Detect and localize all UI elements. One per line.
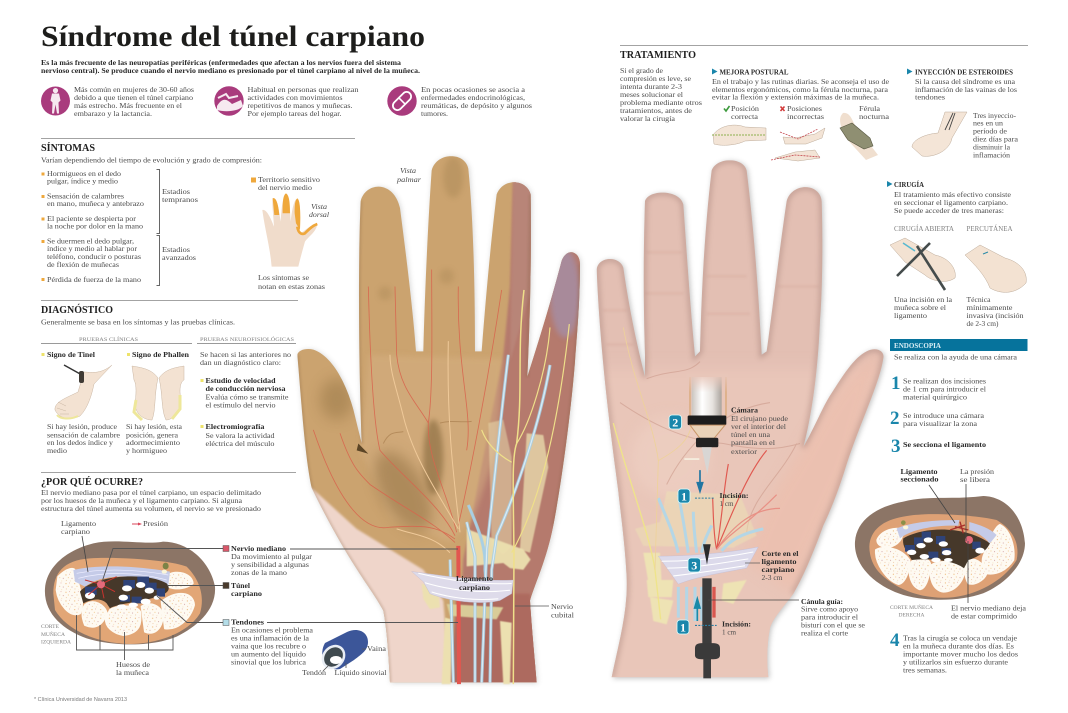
step 4: 4 bbox=[890, 630, 900, 651]
label: vista palmar bbox=[396, 166, 422, 184]
text: demographics: debido a que tienen el túnel carpiano bbox=[74, 93, 193, 102]
carpal ligament band bbox=[658, 547, 758, 584]
test: tinel bbox=[42, 350, 121, 455]
ulnar nerve bbox=[613, 327, 692, 619]
list: symptoms: Hormigueos en el dedo bbox=[47, 169, 121, 178]
label: tendones: vaina que los recubre o bbox=[231, 642, 306, 650]
intro paragraph: Es la más frecuente de las neuropatías periféricas (enfermedades que afectan a los nervios fuera del sistema bbox=[41, 58, 401, 67]
text: endoscopia intro: Se realiza con la ayuda de una cámara bbox=[894, 352, 1018, 362]
label: nervio cubital: cubital bbox=[551, 610, 575, 620]
label: la presión se libera bbox=[960, 467, 994, 484]
bracket: advanced stages: avanzados bbox=[162, 253, 196, 262]
illustration: correct hand bbox=[712, 125, 766, 145]
step 3 bbox=[891, 436, 986, 457]
label: tendones bbox=[223, 618, 314, 666]
text: explanation bbox=[41, 488, 261, 513]
test: phallen bbox=[126, 350, 190, 455]
label: vista palmar: palmar bbox=[396, 175, 422, 184]
test: tinel: Signo de Tinel bbox=[47, 350, 96, 359]
label: tendones: Tendones bbox=[231, 618, 264, 626]
list: symptoms: teléfono, conducir o posturas bbox=[47, 252, 141, 261]
label: ligamento carpiano bbox=[61, 519, 96, 536]
label: tendones: un aumento del líquido bbox=[231, 650, 306, 658]
bracket: early stages: Estadios bbox=[162, 187, 190, 196]
footer source: * Clínica Universidad de Navarra 2013 bbox=[34, 697, 127, 703]
label: huesos: la muñeca bbox=[116, 668, 150, 677]
test: electromyography: Se valora la actividad bbox=[206, 431, 275, 440]
hand shadow bbox=[598, 161, 885, 678]
label: cánula guía: Cánula guía: bbox=[801, 597, 843, 606]
label: vista dorsal: dorsal bbox=[309, 210, 329, 219]
label: nervio cubital bbox=[515, 602, 575, 620]
tunnel bbox=[80, 576, 169, 608]
label: corte en el ligamento bbox=[745, 549, 799, 582]
step 4: y utilizarlos sin esfuerzo durante bbox=[903, 658, 1009, 666]
caption: zones: notan en estas zonas bbox=[258, 282, 325, 291]
test: tinel: Si hay lesión, produce bbox=[47, 422, 118, 431]
label: ligamento seccionado bbox=[900, 467, 939, 484]
label: nervio liberado: de estar comprimido bbox=[951, 612, 1017, 620]
label: corte en el ligamento: carpiano bbox=[762, 565, 795, 574]
test: phallen: Si hay lesión, esta bbox=[126, 422, 183, 431]
labels: sheath parts bbox=[302, 644, 387, 677]
step 2: Se introduce una cámara bbox=[903, 411, 985, 420]
label: cámara: túnel en una bbox=[731, 430, 771, 439]
label: tendones: es una inflamación de la bbox=[231, 634, 310, 642]
label: férula: nocturna bbox=[859, 112, 890, 121]
bracket: early stages bbox=[156, 170, 198, 234]
label: nervio mediano: y sensibilidad a algunas bbox=[231, 560, 309, 569]
icon: bandage bbox=[387, 86, 417, 116]
text: síntomas intro: Varían dependiendo del tiempo de evolución y grado de compresión: bbox=[41, 156, 262, 164]
blue arrow up bbox=[695, 599, 700, 621]
intro paragraph bbox=[41, 58, 420, 75]
legend: territory bbox=[251, 175, 320, 192]
icon: woman bbox=[41, 86, 70, 116]
label: huesos: Huesos de bbox=[116, 660, 151, 669]
test: phallen: adormecimiento bbox=[126, 438, 180, 447]
test: nerve conduction: Evalúa cómo se transmite bbox=[206, 392, 289, 402]
metacarpal and wrist bones bbox=[422, 420, 548, 684]
icon: repetitive movement bbox=[214, 86, 244, 116]
label: cámara: Cámara bbox=[731, 406, 758, 414]
tendons bbox=[658, 495, 763, 621]
label: correct position: correcta bbox=[731, 112, 759, 121]
legend: territory: del nervio medio bbox=[258, 183, 312, 192]
leader: nervio mediano bbox=[102, 548, 458, 582]
text: tratamiento intro: problema mediante otros bbox=[620, 98, 702, 107]
label: nervio mediano: zonas de la mano bbox=[231, 568, 287, 577]
step 4: en la muñeca durante dos días. Es bbox=[903, 642, 1014, 650]
illustration: palmar hand with nerves and tendons bbox=[290, 150, 600, 686]
text: demographics: embarazo y la lactancia. bbox=[74, 109, 152, 118]
test: tinel: sensación de calambre bbox=[47, 430, 121, 440]
label: ligamento seccionado: Ligamento bbox=[900, 467, 938, 476]
label: cánula guía: Sirve como apoyo bbox=[801, 604, 858, 614]
step 1: de 1 cm para introducir el bbox=[903, 384, 987, 394]
label: corte en el ligamento: Corte en el bbox=[762, 549, 799, 558]
test: nerve conduction: Estudio de velocidad bbox=[206, 376, 276, 385]
label: ligamento carpiano: Ligamento bbox=[61, 519, 96, 528]
illustration: injection bbox=[912, 112, 967, 156]
label: corte muñeca derecha: DERECHA bbox=[898, 612, 924, 618]
leader lines: released ligament bbox=[929, 484, 968, 603]
text: activities: Habitual en personas que realizan bbox=[248, 85, 359, 94]
step 3: 3 bbox=[891, 436, 900, 457]
text: tratamiento intro bbox=[620, 66, 702, 123]
bracket: bones bbox=[76, 615, 173, 660]
label: cámara: pantalla en el bbox=[731, 438, 776, 447]
label: cánula guía: realiza el corte bbox=[801, 628, 849, 638]
label: correct position bbox=[724, 104, 759, 121]
column: percutánea: invasiva (incisión bbox=[966, 311, 1024, 320]
label: corte muñeca derecha bbox=[890, 603, 933, 618]
text: explanation: por los huesos de la muñeca y el ligamento carpiano. Si alguna bbox=[41, 496, 243, 505]
label: túnel carpiano: Túnel bbox=[231, 581, 251, 590]
text: activities: actividades con movimientos bbox=[248, 93, 342, 102]
column: percutánea: mínimamente bbox=[966, 303, 1013, 312]
test: electromyography bbox=[200, 422, 275, 448]
tendons bbox=[450, 355, 550, 682]
list: symptoms: índice y medio al hablar por bbox=[47, 244, 137, 253]
label: corte en el ligamento: 2-3 cm bbox=[762, 573, 782, 582]
badge 1 lower: 1 bbox=[680, 620, 686, 634]
label: vista dorsal bbox=[309, 202, 329, 219]
step 4: Tras la cirugía se coloca un vendaje bbox=[903, 634, 1018, 642]
test: tinel: medio bbox=[47, 446, 67, 455]
label: incisión lower: Incisión: bbox=[722, 620, 751, 628]
label: corte muñeca izquierda: MUÑECA bbox=[41, 630, 65, 638]
label: férula bbox=[859, 104, 890, 121]
heading: diagnóstico: DIAGNÓSTICO bbox=[41, 304, 113, 316]
tendon highlights bbox=[450, 355, 550, 682]
badge 1 upper: 1 bbox=[681, 490, 687, 504]
label: nervio mediano: Da movimiento al pulgar bbox=[231, 552, 312, 561]
list: symptoms: Pérdida de fuerza de la mano bbox=[47, 275, 141, 284]
label: nervio liberado bbox=[951, 604, 1027, 620]
label: ligamento carpiano: carpiano bbox=[61, 527, 90, 536]
section: cirugía: en seccionar el ligamento carpiano. bbox=[894, 198, 1008, 207]
leader: tendones bbox=[157, 596, 458, 622]
text: diagnóstico intro: Generalmente se basa en los síntomas y las pruebas clínicas. bbox=[41, 318, 235, 326]
section: inyección de esteroides: Si la causa del síndrome es una bbox=[915, 77, 1016, 86]
label: ligamento carpiano on hand: carpiano bbox=[459, 583, 490, 592]
diagram: left wrist cross-section bbox=[45, 541, 215, 644]
tendons bbox=[85, 577, 165, 609]
label: correct position: Posición bbox=[731, 104, 759, 113]
carpal bones bbox=[635, 491, 757, 624]
label: nervio liberado: El nervio mediano deja bbox=[951, 604, 1027, 612]
test: nerve conduction bbox=[200, 376, 289, 410]
leader: ligament bbox=[82, 536, 88, 572]
section: inyección de esteroides: INYECCIÓN DE ESTEROIDES bbox=[915, 68, 1013, 76]
illustration: night splint bbox=[840, 113, 878, 160]
section: inyección de esteroides: inflamación de las vainas de los bbox=[915, 85, 1017, 94]
badge 1 upper bbox=[678, 489, 690, 504]
camera device bbox=[684, 374, 728, 474]
title: Síndrome del túnel carpiano bbox=[41, 20, 425, 53]
text: activities: repetitivos de manos y muñecas. bbox=[248, 101, 353, 110]
column: percutánea: PERCUTÁNEA bbox=[966, 225, 1012, 233]
text: demographics: más estrecho. Más frecuente en el bbox=[74, 101, 183, 110]
step 1 bbox=[891, 373, 987, 402]
text: injection caption: inflamación bbox=[973, 150, 1010, 160]
label: incorrect positions: Posiciones bbox=[787, 104, 822, 113]
label: cánula guía: bisturí con el que se bbox=[801, 620, 866, 630]
section: cirugía bbox=[887, 181, 1012, 215]
legend: territory: Territorio sensitivo bbox=[258, 175, 320, 184]
column: cirugía abierta: muñeca sobre el bbox=[894, 303, 947, 312]
label: cámara: exterior bbox=[731, 447, 757, 456]
blue arrow down bbox=[697, 470, 703, 491]
icon: tendon sheath bbox=[317, 630, 368, 674]
caption: zones bbox=[258, 273, 325, 291]
skin and fat bbox=[855, 496, 1025, 600]
column: percutánea: Técnica bbox=[966, 295, 991, 304]
illustration: incorrect hands bbox=[771, 128, 825, 161]
test: phallen: y hormigueo bbox=[126, 446, 167, 455]
step 2: 2 bbox=[890, 408, 900, 429]
hand colour regions bbox=[297, 156, 580, 682]
text: demographics: Más común en mujeres de 30-60 años bbox=[74, 85, 194, 94]
carpal bones bbox=[57, 569, 194, 635]
label: corte muñeca izquierda bbox=[41, 624, 71, 646]
text: tratamiento intro: Si el grado de bbox=[620, 66, 664, 75]
step 4: tres semanas. bbox=[903, 666, 947, 674]
text: explanation: estructura del túnel aumenta su volumen, el nervio se ve presionado bbox=[41, 504, 261, 513]
label: nervio mediano bbox=[223, 544, 312, 577]
label: incisión upper: 1 cm bbox=[720, 499, 734, 508]
illustration: natural palm with endoscopy procedure bbox=[590, 150, 900, 686]
incision mark bbox=[695, 497, 715, 500]
icon: dorsal hand bbox=[262, 193, 317, 267]
sensory nerves bbox=[390, 341, 460, 553]
step 3: Se secciona el ligamento bbox=[903, 440, 986, 449]
text: neuro intro bbox=[200, 350, 291, 367]
text: associated diseases bbox=[421, 85, 532, 118]
label: túnel carpiano bbox=[223, 581, 262, 598]
hand shadow bbox=[298, 157, 581, 683]
ulnar nerve bbox=[482, 290, 569, 684]
tunnel bbox=[903, 530, 990, 568]
carpal bones bbox=[876, 525, 1014, 592]
text: demographics bbox=[74, 85, 194, 118]
text: tratamiento intro: valorar la cirugía bbox=[620, 114, 676, 123]
text: activities bbox=[248, 85, 359, 118]
list: symptoms: la noche por dolor en la mano bbox=[47, 222, 143, 230]
text: injection caption: disminuir la bbox=[973, 142, 1011, 152]
bracket: advanced stages: Estadios bbox=[162, 245, 190, 254]
label: nervio mediano: Nervio mediano bbox=[231, 544, 286, 553]
labels: sheath parts: Tendón bbox=[302, 668, 326, 677]
label: vista dorsal: Vista bbox=[311, 202, 327, 211]
step 1: material quirúrgico bbox=[903, 392, 967, 402]
text: tratamiento intro: compresión es leve, se bbox=[620, 74, 692, 83]
text: injection caption: diez días para bbox=[973, 134, 1019, 144]
text: neuro intro: Se hacen si las anteriores no bbox=[200, 350, 291, 359]
text: activities: Por ejemplo tareas del hogar. bbox=[248, 109, 342, 118]
test: electromyography: Electromiografía bbox=[206, 422, 265, 431]
section: inyección de esteroides: tendones bbox=[915, 92, 945, 102]
subheading: clinical tests: PRUEBAS CLÍNICAS bbox=[79, 335, 138, 343]
section: cirugía: El tratamiento más efectivo consiste bbox=[894, 190, 1012, 199]
test: phallen: Signo de Phallen bbox=[132, 350, 190, 359]
text: injection caption: Tres inyeccio- bbox=[973, 111, 1016, 120]
leader: túnel bbox=[167, 584, 223, 586]
step 4 bbox=[890, 630, 1018, 674]
panel: endoscopia header bbox=[890, 339, 1028, 351]
intro paragraph: nervioso central). Se produce cuando el nervio mediano es presionado por el túnel carpiano al nivel de la muñeca. bbox=[41, 66, 420, 75]
tendons bbox=[905, 532, 985, 562]
badge 2: 2 bbox=[672, 416, 678, 430]
label: incisión lower bbox=[722, 620, 751, 636]
label: ligamento seccionado: seccionado bbox=[900, 474, 939, 484]
median nerve below ligament bbox=[709, 587, 719, 618]
list: symptoms bbox=[42, 169, 144, 284]
label: tendones: sinovial que los lubrica bbox=[231, 658, 307, 666]
label: cánula guía: para introducir el bbox=[801, 612, 859, 622]
section: mejora postural bbox=[712, 68, 890, 102]
step 1: Se realizan dos incisiones bbox=[903, 376, 986, 386]
label: corte muñeca derecha: CORTE MUÑECA bbox=[890, 603, 933, 611]
test: nerve conduction: de conducción nerviosa bbox=[206, 384, 286, 393]
column: percutánea: de 2-3 cm) bbox=[966, 319, 999, 328]
step 4: importante mover mucho los dedos bbox=[903, 650, 1018, 658]
list: symptoms: Se duermen el dedo pulgar, bbox=[47, 236, 134, 246]
nerve fan bbox=[713, 450, 780, 549]
text: injection caption: período de bbox=[973, 126, 1008, 136]
column: percutánea bbox=[965, 225, 1026, 328]
section: mejora postural: evitar la flexión y extensión máximas de la muñeca. bbox=[712, 92, 879, 102]
heading: por qué ocurre: ¿POR QUÉ OCURRE? bbox=[41, 476, 143, 488]
median nerve branches bbox=[313, 269, 502, 542]
label: la presión se libera: La presión bbox=[960, 467, 994, 476]
column: cirugía abierta: Una incisión en la bbox=[894, 295, 953, 304]
section: mejora postural: MEJORA POSTURAL bbox=[720, 68, 789, 76]
label: tendones: En ocasiones el problema bbox=[231, 626, 314, 634]
step 2 bbox=[890, 408, 985, 429]
label: cámara: ver el interior del bbox=[731, 422, 787, 431]
labels: sheath parts: Vaina bbox=[367, 644, 387, 653]
label: férula: Férula bbox=[859, 104, 881, 113]
label: corte muñeca izquierda: CORTE bbox=[41, 624, 60, 630]
test: nerve conduction: el estímulo del nervio bbox=[206, 400, 276, 410]
label: la presión se libera: se libera bbox=[960, 475, 991, 484]
list: symptoms: Sensación de calambres bbox=[47, 192, 124, 200]
test: electromyography: eléctrica del músculo bbox=[206, 439, 275, 448]
legend: presión bbox=[132, 519, 168, 528]
subheading: neurophysiological tests: PRUEBAS NEUROFISIOLÓGICAS bbox=[200, 335, 294, 343]
text: associated diseases: tumores. bbox=[421, 109, 448, 118]
diagram: right wrist cross-section bbox=[855, 496, 1025, 600]
text: associated diseases: reumáticas, de depósito y algunos bbox=[421, 101, 532, 110]
heading: tratamiento: TRATAMIENTO bbox=[620, 49, 696, 61]
skin and fat bbox=[45, 541, 215, 644]
list: symptoms: pulgar, índice y medio bbox=[47, 176, 118, 186]
label: huesos bbox=[116, 660, 151, 677]
heading: síntomas: SÍNTOMAS bbox=[41, 142, 95, 154]
label: incisión upper: Incisión: bbox=[720, 491, 748, 500]
label: incisión lower: 1 cm bbox=[722, 628, 736, 636]
badge 3 bbox=[688, 558, 700, 572]
ulnar artery and nerve bbox=[901, 520, 908, 529]
ligament ends bbox=[897, 520, 997, 543]
text: associated diseases: enfermedades endocrinológicas, bbox=[421, 93, 525, 102]
text: neuro intro: dan un diagnóstico claro: bbox=[200, 358, 281, 367]
median nerve bbox=[965, 536, 973, 544]
panel: endoscopia header: ENDOSCOPIA bbox=[894, 341, 942, 350]
section: mejora postural: elementos ergonómicos, como la férula nocturna, para bbox=[712, 85, 889, 94]
skin colour and shading bbox=[596, 160, 884, 678]
section: cirugía: Se puede acceder de tres maneras: bbox=[894, 206, 1004, 215]
caption: zones: Los síntomas se bbox=[258, 273, 310, 282]
step 1: 1 bbox=[891, 373, 900, 394]
label: cámara: El cirujano puede bbox=[731, 414, 789, 423]
label: ligamento carpiano on hand bbox=[456, 574, 493, 592]
bracket: early stages: tempranos bbox=[162, 195, 198, 204]
label: incisión upper bbox=[720, 491, 748, 508]
label: nervio cubital: Nervio bbox=[551, 602, 573, 611]
labels: sheath parts: Líquido sinovial bbox=[334, 668, 387, 677]
incision mark lower bbox=[695, 624, 717, 627]
cannula and scalpel bbox=[695, 544, 720, 678]
cut fibres bbox=[950, 522, 968, 533]
label: incorrect positions: incorrectas bbox=[787, 112, 824, 121]
text: tratamiento intro: tratamientos, antes de bbox=[620, 106, 693, 115]
legend: presión: Presión bbox=[143, 519, 168, 528]
carpal ligament band bbox=[412, 572, 513, 603]
step 2: para visualizar la zona bbox=[903, 419, 978, 428]
median nerve trunk bbox=[452, 546, 465, 684]
text: explanation: El nervio mediano pasa por el túnel carpiano, un espacio delimitado bbox=[41, 488, 261, 497]
label: túnel carpiano: carpiano bbox=[231, 589, 262, 598]
label: cánula guía bbox=[708, 597, 866, 638]
ulnar artery and nerve bbox=[162, 563, 169, 574]
test: phallen: posición, genera bbox=[126, 430, 179, 440]
subheading: neurophysiological tests bbox=[197, 335, 296, 344]
bracket: advanced stages bbox=[156, 236, 196, 286]
label: corte muñeca izquierda: IZQUIERDA bbox=[41, 640, 71, 646]
text: tratamiento intro: meses solucionar el bbox=[620, 90, 684, 99]
column: cirugía abierta bbox=[890, 225, 955, 320]
text: associated diseases: En pocas ocasiones se asocia a bbox=[421, 85, 526, 94]
label: cámara bbox=[731, 406, 789, 456]
badge 2 bbox=[669, 415, 682, 430]
section: inyección de esteroides bbox=[907, 68, 1017, 102]
text: tratamiento intro: intenta durante 2-3 bbox=[620, 82, 682, 91]
section: cirugía: CIRUGÍA bbox=[894, 181, 924, 189]
section: mejora postural: En el trabajo y las rutinas diarias. Se aconseja el uso de bbox=[712, 77, 890, 86]
column: cirugía abierta: CIRUGÍA ABIERTA bbox=[894, 225, 954, 233]
column: cirugía abierta: ligamento bbox=[894, 311, 927, 320]
badge 3: 3 bbox=[691, 558, 697, 572]
test: tinel: en los dedos índice y bbox=[47, 438, 113, 447]
list: symptoms: de flexión de muñecas bbox=[47, 260, 119, 269]
list: symptoms: El paciente se despierta por bbox=[47, 214, 136, 223]
median nerve bbox=[85, 577, 117, 598]
text: injection caption bbox=[973, 111, 1019, 160]
text: injection caption: nes en un bbox=[973, 118, 1003, 128]
badge 1 lower bbox=[677, 620, 689, 634]
label: ligamento carpiano on hand: Ligamento bbox=[456, 574, 493, 583]
label: corte en el ligamento: ligamento bbox=[762, 557, 797, 566]
label: vista palmar: Vista bbox=[400, 166, 416, 175]
ligament bbox=[73, 566, 170, 587]
label: incorrect positions bbox=[780, 104, 824, 121]
list: symptoms: en mano, muñeca y antebrazo bbox=[47, 199, 144, 208]
